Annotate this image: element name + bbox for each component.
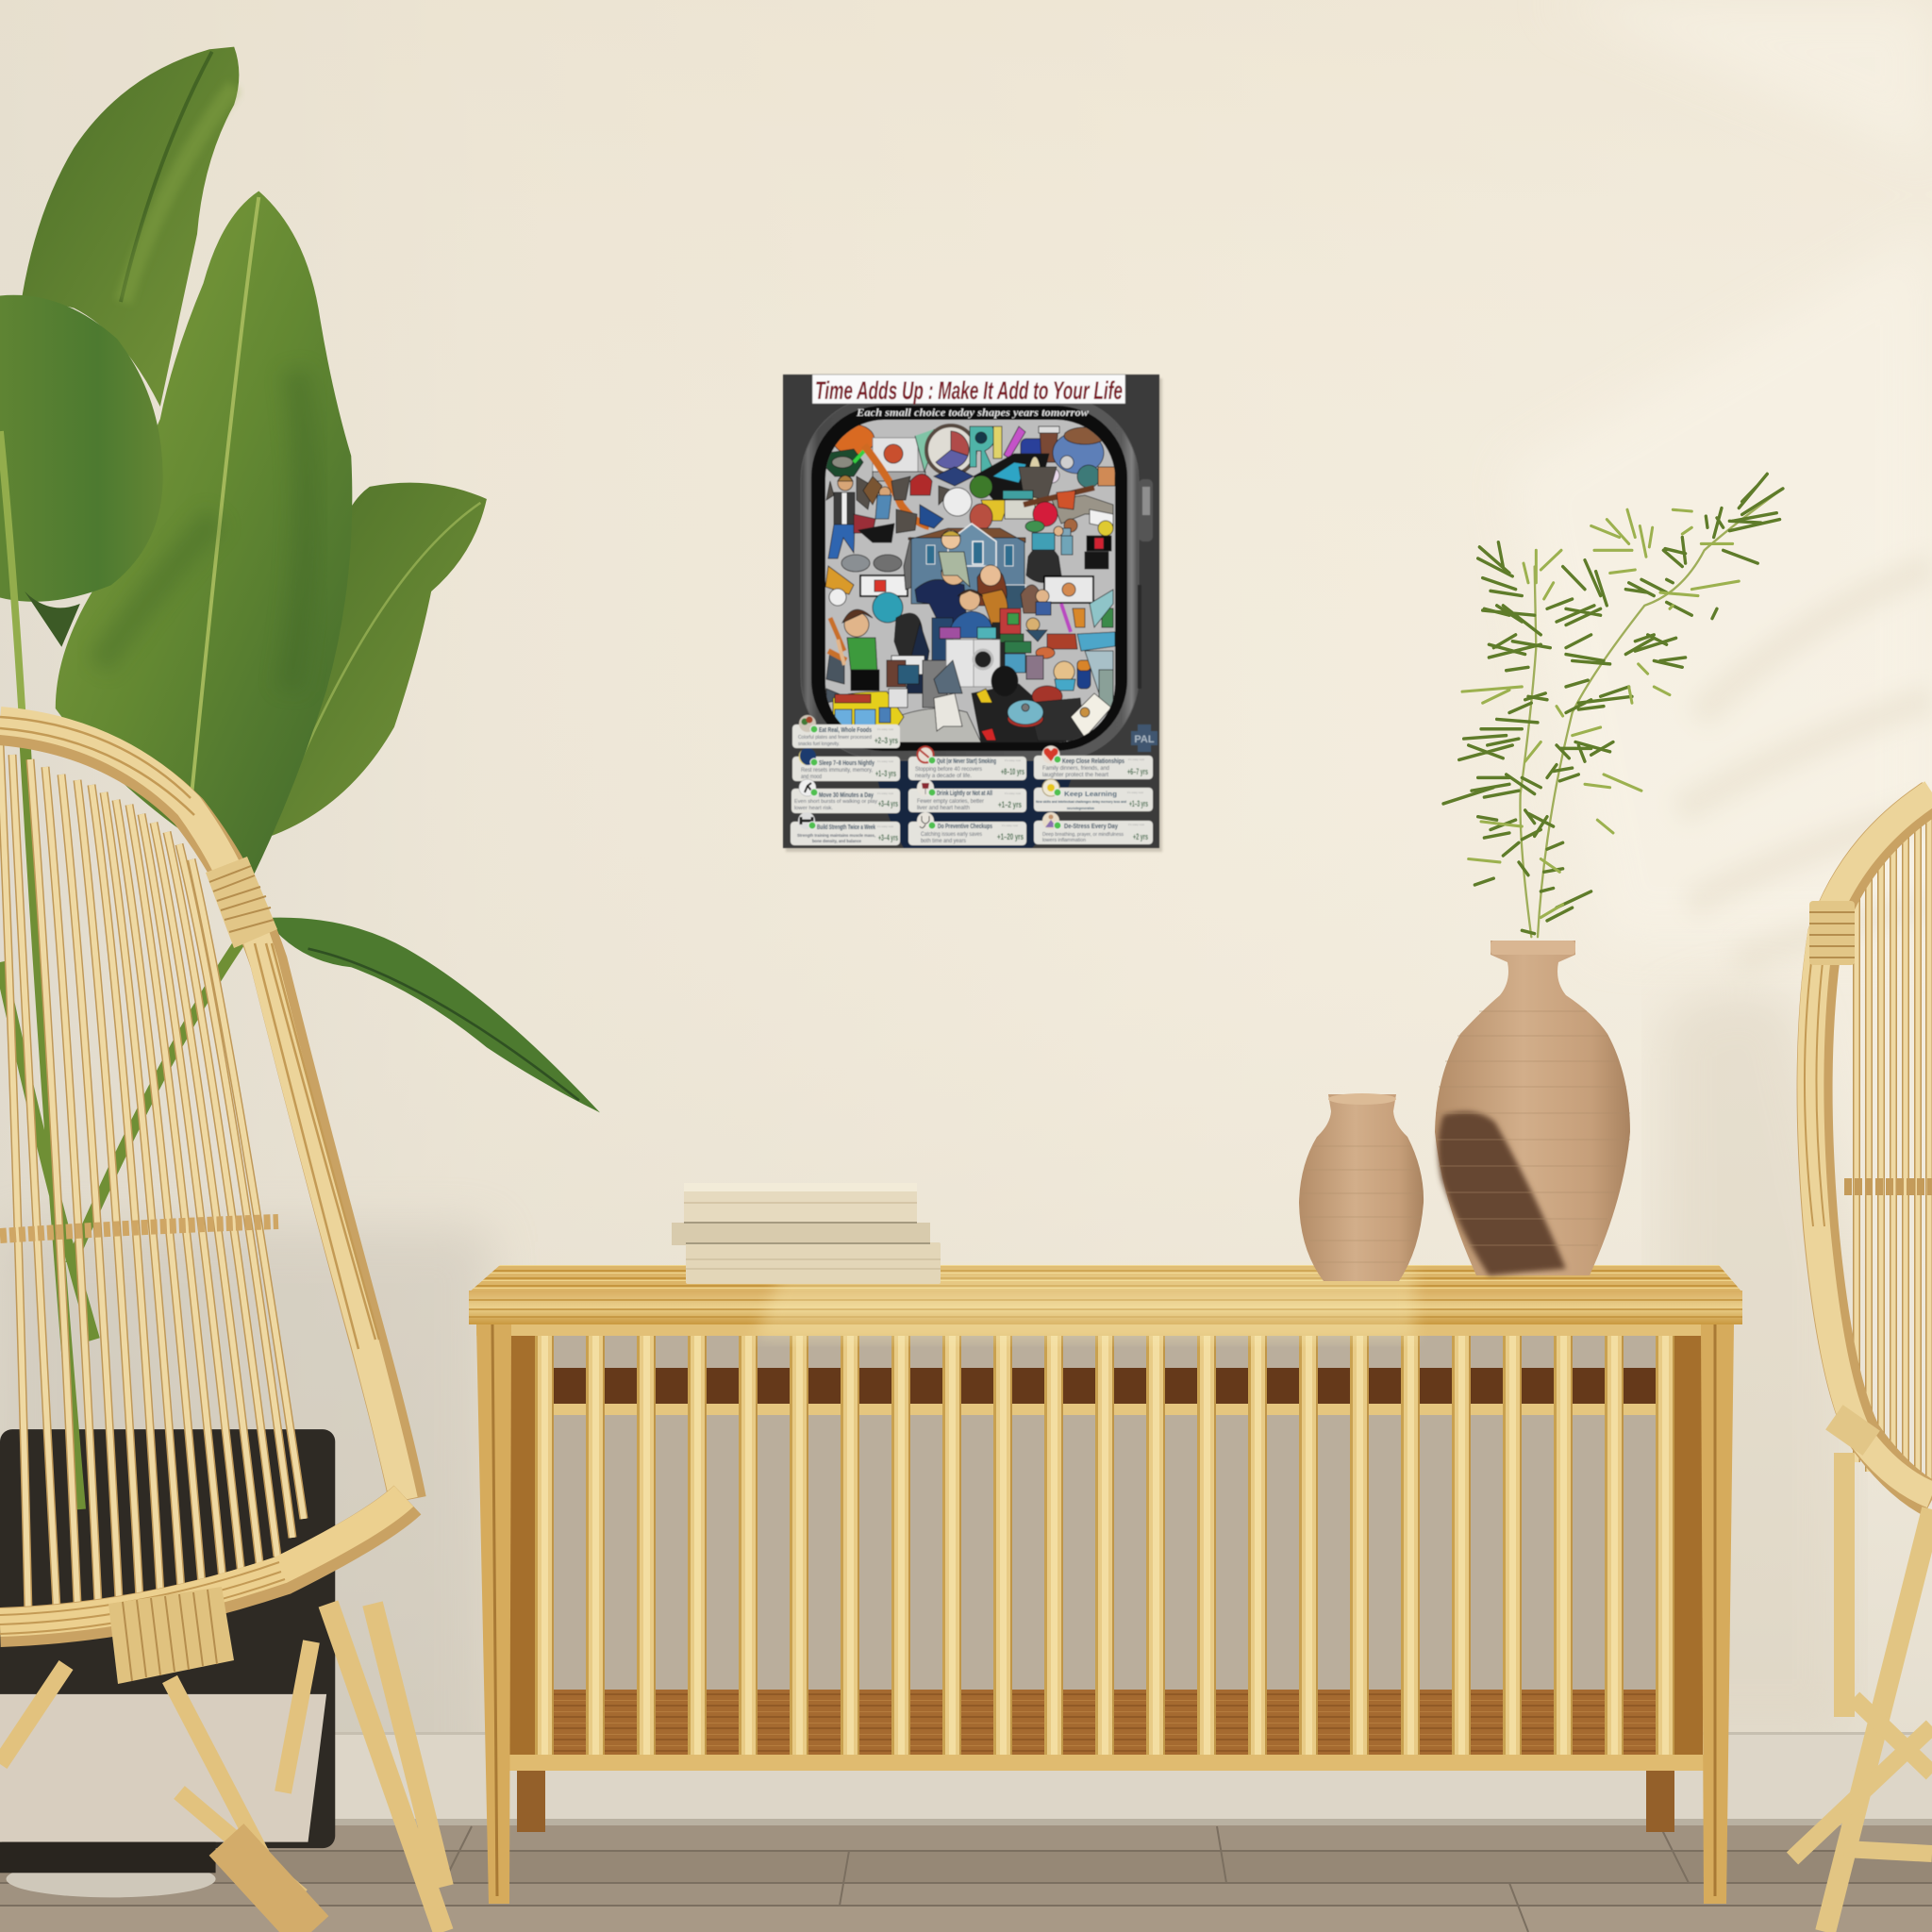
card: Move 30 Minutes a Day: +3–4 yrs [878,799,898,808]
smartwatch bezel [801,396,1139,760]
card: Move 30 Minutes a Day: it's easy now [877,791,894,795]
chair green stems behind [0,717,245,1509]
side panel dark [509,1336,535,1756]
icon: wine glass [917,779,936,796]
right chair wrap [1809,901,1880,1456]
collage: man with dog [828,475,894,558]
table dark back rail [509,1368,1703,1404]
right chair frame [1805,792,1932,1500]
card: Keep Learning: +1–3 yrs [1129,799,1148,808]
card: Keep Learning [1034,779,1153,811]
card: Eat Real, Whole Foods: it's easy now [877,727,894,731]
icon: stethoscope [917,812,936,829]
card: Quit Smoking: +8–10 yrs [1001,767,1024,776]
card: Keep Close Relationships: laughter protect the heart [1042,773,1108,778]
collage: house [908,524,1025,608]
card: Keep Close Relationships: Keep Close Relationships [1062,757,1124,765]
chair back rail and arm [0,717,408,1500]
card: Drink Lightly: it's easy now [1005,791,1022,795]
bamboo plant [1443,474,1783,937]
card: Sleep 7-8 Hours Nightly: and mood [801,774,822,780]
chair horizontal band [0,1222,278,1236]
PAL logo: PAL [1134,734,1155,745]
chair legs [0,1604,443,1932]
card: Eat Real, Whole Foods [792,715,900,748]
icon: food [799,715,818,733]
card: Build Strength Twice a Week: +3–4 yrs [878,833,898,842]
card: Drink Lightly: Drink Lightly or Not at All [937,789,992,797]
card: Eat Real, Whole Foods: snacks fuel longevity. [798,741,840,747]
poster shadow [786,378,1162,852]
card: Build Strength Twice a Week: Strength training maintains muscle mass, [797,833,875,838]
lower shelf [509,1690,1703,1756]
front right leg [1701,1324,1734,1904]
right chair ribs [1857,809,1929,1500]
card: Quit Smoking: Stopping before 40 recovers [915,767,982,773]
card: Do Preventive Checkups: it's easy now [1002,824,1019,827]
card: Drink Lightly: Fewer empty calories, better [917,799,984,805]
card: Keep Learning: New skills and intellectual challenges delay memory loss and [1036,799,1126,804]
collage: right side objects [1005,526,1115,708]
poster background [783,375,1159,848]
card: Keep Learning: Keep Learning [1064,790,1117,798]
collage: dark figure and toys [887,608,1024,708]
card: Keep Learning: neurodegeneration [1067,806,1094,810]
plant pot [0,1429,335,1897]
card: Drink Lightly: +1–2 yrs [998,800,1022,809]
card: Drink Lightly: liver and heart health [917,806,970,811]
right chair legs [1792,1453,1932,1932]
card: Build Strength Twice a Week: it's easy now [877,824,894,828]
poster navy bottom shape [873,755,1077,848]
card: Move 30 Minutes a Day: lower heart risk. [794,806,833,811]
card: Quit Smoking [908,747,1026,780]
card: Sleep 7-8 Hours Nightly: it's easy now [877,759,894,763]
smartwatch black ring [811,406,1127,751]
title banner: Time Adds Up : Make It Add to Your Life [815,376,1123,405]
table inner back wall [509,1336,1707,1694]
bamboo dark leaves [1443,474,1783,934]
front rail [500,1755,1717,1771]
chair seat rail [0,1496,408,1634]
icon: sun [1042,779,1061,796]
collage: bowls and video frame [841,555,870,572]
card: Do Preventive Checkups: Do Preventive Checkups [938,822,992,830]
card: Move 30 Minutes a Day: Even short bursts of walking or play [794,799,878,805]
collage: filler clutter [826,467,1057,533]
card: Sleep 7-8 Hours Nightly: +1–3 yrs [875,769,896,778]
chair ribs [0,745,304,1613]
console table [469,1265,1742,1904]
right chair band [1844,1178,1932,1195]
collage: upper objects [825,425,1115,533]
front left leg [476,1324,511,1904]
card: De-Stress Every Day: De-Stress Every Day [1064,822,1119,830]
right wicker chair [1792,792,1932,1932]
chair seat wrap [108,1587,234,1684]
title banner [812,375,1125,405]
card: Eat Real, Whole Foods: Eat Real, Whole Foods [819,725,872,734]
leaf: left [0,295,163,715]
stack of books [672,1183,941,1284]
icon: no smoking [917,747,936,764]
collage: boy in green [828,609,879,691]
icon: heart [1041,745,1061,764]
baseboard [0,1732,1932,1826]
back legs [517,1771,545,1832]
collage screen [825,420,1115,742]
icon: meditation [1042,812,1061,829]
card: Quit Smoking: it's easy now [1005,758,1022,762]
leaf: big centre [56,191,352,877]
card: Eat Real, Whole Foods: Colorful plates and fewer processed [798,735,872,741]
card: Sleep 7-8 Hours Nightly: Rest resets immunity, memory, [801,768,873,774]
card: Sleep 7-8 Hours Nightly: Sleep 7–8 Hours Nightly [819,758,875,767]
wooden floor [0,1825,1932,1932]
card: Build Strength Twice a Week: Build Strength Twice a Week [817,823,876,831]
slats [535,1336,1674,1756]
icon: runner [799,779,818,796]
card: Drink Lightly [908,779,1026,812]
smartwatch crown [1138,479,1153,689]
card: Build Strength Twice a Week [791,812,900,845]
card: Move 30 Minutes a Day: Move 30 Minutes a Day [819,791,874,799]
card: Do Preventive Checkups: +1–20 yrs [997,832,1024,841]
bamboo light leaves [1462,509,1739,917]
collage: bottom kitchen and school bus [833,660,1111,742]
collage: family [915,530,1008,675]
icon: moon [799,748,818,766]
bamboo stems [1520,489,1783,937]
chair arm wrap [206,857,277,948]
card: De-Stress Every Day [1034,812,1153,844]
large potted plant [0,47,600,1897]
card: Eat Real, Whole Foods: +2–3 yrs [874,736,898,745]
card: Do Preventive Checkups: Catching issues early saves [921,832,982,838]
card: Keep Close Relationships: +6–7 yrs [1127,767,1148,776]
sun highlight [755,1269,1415,1340]
card: Keep Close Relationships: it's easy now [1128,758,1145,761]
card: De-Stress Every Day: Deep breathing, prayer, or mindfulness [1042,832,1124,838]
leaf: far right [258,483,487,841]
collage: washer and dryer [940,627,1000,687]
card: Keep Learning: it's easy now [1127,791,1144,794]
card: Keep Close Relationships [1034,745,1153,779]
card: Keep Close Relationships: Family dinners, friends, and [1042,766,1109,772]
card: De-Stress Every Day: it's easy now [1128,823,1145,826]
card: De-Stress Every Day: +2 yrs [1133,832,1148,841]
large vase [1435,941,1630,1275]
small vase [1299,1093,1424,1281]
card: Sleep 7-8 Hours Nightly [792,748,900,781]
leaf: drooping [265,918,600,1112]
card: De-Stress Every Day: lowers inflammation [1042,838,1086,843]
card: Move 30 Minutes a Day [791,779,900,813]
table top [469,1265,1742,1292]
card: Do Preventive Checkups [908,812,1026,845]
card: Quit Smoking: Quit (or Never Start) Smoking [937,757,996,765]
icon: dumbbell [798,812,816,829]
PAL logo [1131,724,1158,752]
card: Do Preventive Checkups: both time and years [921,839,966,844]
left wicker chair [0,717,443,1932]
card: Quit Smoking: nearly a decade of life. [915,774,972,779]
card: Build Strength Twice a Week: bone density, and balance [812,839,861,843]
poster: Time Adds Up [783,375,1162,852]
collage: middle objects [825,467,1113,703]
subtitle: Each small choice today shapes years tomorrow [856,406,1090,419]
leaf: back upper [23,47,239,407]
